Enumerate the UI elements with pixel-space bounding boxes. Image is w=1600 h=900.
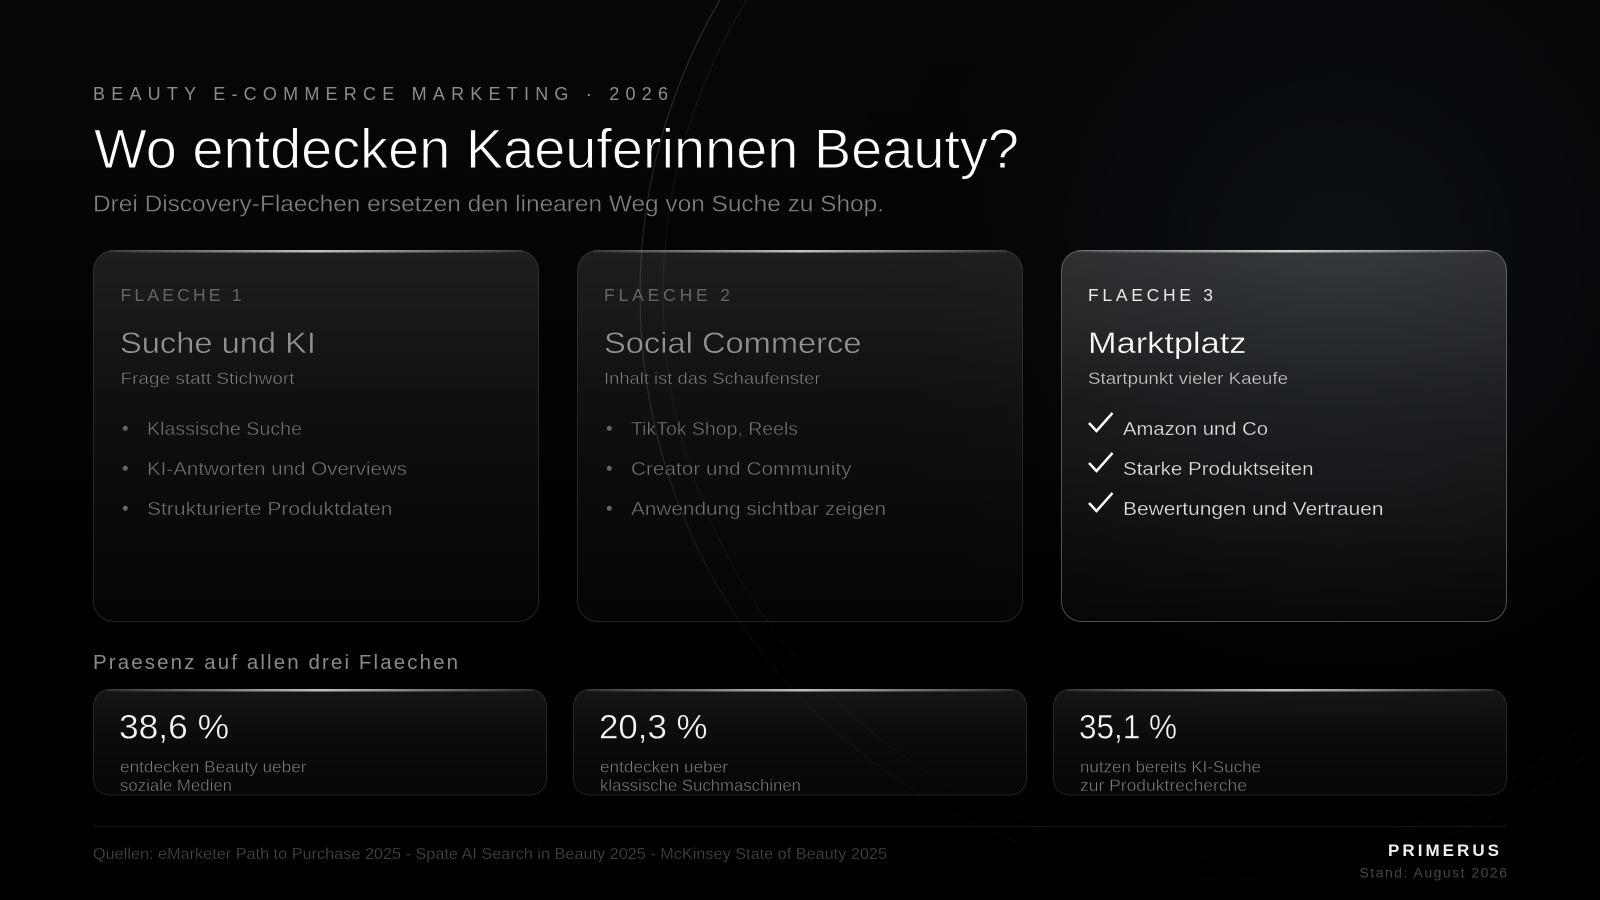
- stat value: 20,3 %: [599, 708, 708, 746]
- decorative arcs: [640, 0, 1600, 880]
- footer sources: Quellen: eMarketer Path to Purchase 2025 - Spate AI Search in Beauty 2025 - McKinsey State of Beauty 2025: [93, 846, 887, 863]
- list: TikTok Shop, Reels: [631, 418, 798, 439]
- list: Klassische Suche: [147, 418, 302, 439]
- section heading: Praesenz auf allen drei Flaechen: [93, 651, 458, 674]
- label: FLAECHE 2: [604, 285, 730, 305]
- stat label: [1080, 758, 1261, 795]
- stat label: [600, 758, 801, 795]
- stat label: zur Produktrecherche: [1080, 777, 1247, 795]
- subtitle: Drei Discovery-Flaechen ersetzen den linearen Weg von Suche zu Shop.: [93, 190, 884, 216]
- stat label: entdecken Beauty ueber: [120, 758, 307, 776]
- checklist: Amazon und Co: [1123, 418, 1268, 439]
- date: Stand: August 2026: [1360, 864, 1507, 880]
- stat label: nutzen bereits KI-Suche: [1080, 758, 1261, 776]
- checklist: Starke Produktseiten: [1123, 458, 1314, 479]
- logo wordmark: PRIMERUS: [1388, 841, 1499, 860]
- stat value: 35,1 %: [1079, 708, 1177, 746]
- checklist: Bewertungen und Vertrauen: [1123, 498, 1384, 519]
- stat label: klassische Suchmaschinen: [600, 777, 801, 795]
- card subtitle: Inhalt ist das Schaufenster: [604, 369, 821, 388]
- stat card: 35,1 %: [1054, 689, 1506, 795]
- stat label: soziale Medien: [120, 777, 232, 795]
- card title: Suche und KI: [120, 327, 316, 360]
- card title: Marktplatz: [1088, 327, 1246, 360]
- list: Creator und Community: [631, 458, 852, 479]
- list: KI-Antworten und Overviews: [147, 458, 407, 479]
- label: FLAECHE 3: [1088, 285, 1213, 305]
- card subtitle: Startpunkt vieler Kaeufe: [1088, 369, 1288, 388]
- card title: Social Commerce: [604, 327, 862, 360]
- label: FLAECHE 1: [120, 285, 242, 305]
- panel: Flaeche 1: [94, 250, 538, 622]
- footer brand: [1360, 841, 1507, 880]
- list: [607, 418, 886, 519]
- list: [123, 418, 407, 519]
- stat value: 38,6 %: [119, 708, 229, 746]
- stat label: [120, 758, 307, 795]
- list: Anwendung sichtbar zeigen: [631, 498, 886, 519]
- panel: Flaeche 2: [578, 250, 1022, 622]
- stat card: 38,6 %: [94, 689, 546, 795]
- header: [93, 84, 1019, 216]
- checklist: [1089, 413, 1384, 519]
- title: Wo entdecken Kaeuferinnen Beauty?: [94, 117, 1019, 180]
- list: Strukturierte Produktdaten: [147, 498, 392, 519]
- stat card: 20,3 %: [574, 689, 1026, 795]
- card subtitle: Frage statt Stichwort: [120, 369, 295, 388]
- panel: Flaeche 3 (highlighted): [1062, 250, 1506, 622]
- stat label: entdecken ueber: [600, 758, 729, 776]
- eyebrow: BEAUTY E-COMMERCE MARKETING · 2026: [93, 84, 668, 104]
